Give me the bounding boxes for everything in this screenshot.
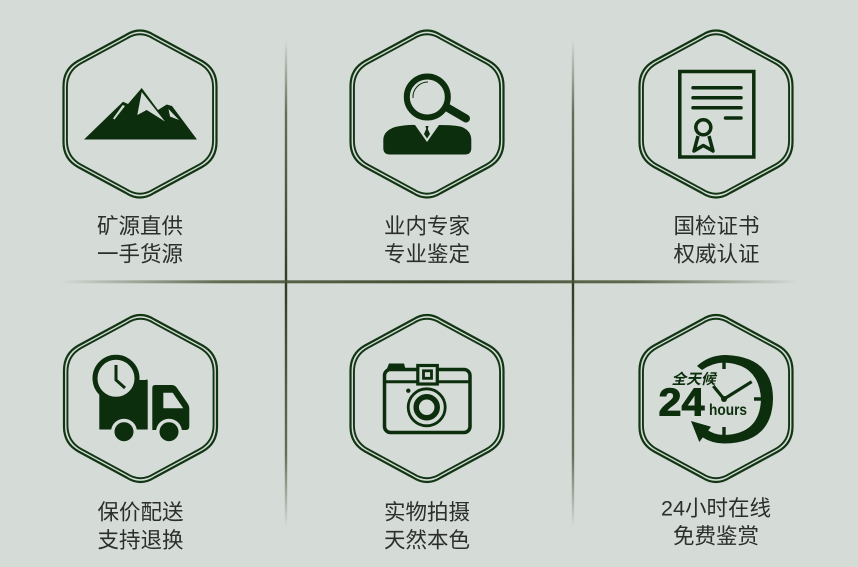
icon: mountain bbox=[84, 88, 197, 140]
caption: expert appraisal: 业内专家 bbox=[384, 214, 470, 238]
panel: real photos bbox=[350, 315, 504, 552]
caption: 24-hour appraisal bbox=[661, 496, 771, 548]
icon: 24-hour clock bbox=[658, 355, 773, 444]
caption: insured delivery: 支持退换 bbox=[97, 528, 184, 552]
icon: person with magnifier bbox=[383, 76, 471, 154]
caption: expert appraisal bbox=[384, 214, 470, 266]
panel: national certificate bbox=[640, 30, 792, 266]
hexagon frame: camera bbox=[350, 315, 504, 482]
hexagon frame: mountain bbox=[64, 30, 216, 198]
panel: 24-hour appraisal bbox=[640, 315, 792, 548]
caption: insured delivery: 保价配送 bbox=[97, 500, 184, 524]
caption: national certificate bbox=[673, 214, 760, 266]
panel: insured delivery bbox=[64, 315, 217, 552]
icon: 24-hour clock: 全天候 bbox=[672, 371, 718, 388]
caption: real photos: 实物拍摄 bbox=[384, 500, 470, 524]
icon: certificate bbox=[680, 72, 754, 157]
hexagon frame: expert bbox=[350, 30, 504, 198]
caption: insured delivery bbox=[97, 500, 184, 552]
caption: mine-direct supply: 一手货源 bbox=[97, 242, 183, 266]
hexagon frame: delivery bbox=[64, 315, 217, 482]
caption: national certificate: 权威认证 bbox=[673, 242, 760, 266]
hexagon frame: 24 hours bbox=[640, 315, 792, 482]
panel: expert appraisal bbox=[350, 30, 504, 266]
panel: mine-direct supply bbox=[64, 30, 216, 266]
caption: real photos bbox=[384, 500, 470, 552]
icon: camera bbox=[384, 364, 470, 432]
caption: 24-hour appraisal: 免费鉴赏 bbox=[673, 524, 759, 548]
caption: expert appraisal: 专业鉴定 bbox=[384, 242, 470, 266]
caption: national certificate: 国检证书 bbox=[673, 214, 760, 238]
caption: 24-hour appraisal: 24小时在线 bbox=[661, 496, 771, 520]
caption: mine-direct supply: 矿源直供 bbox=[97, 214, 183, 238]
icon: 24-hour clock: hours bbox=[709, 402, 747, 419]
caption: mine-direct supply bbox=[97, 214, 183, 266]
caption: real photos: 天然本色 bbox=[384, 528, 470, 552]
hexagon frame: certificate bbox=[640, 30, 792, 198]
icon: delivery truck with clock bbox=[95, 357, 189, 445]
icon: 24-hour clock: 24 bbox=[658, 382, 705, 424]
